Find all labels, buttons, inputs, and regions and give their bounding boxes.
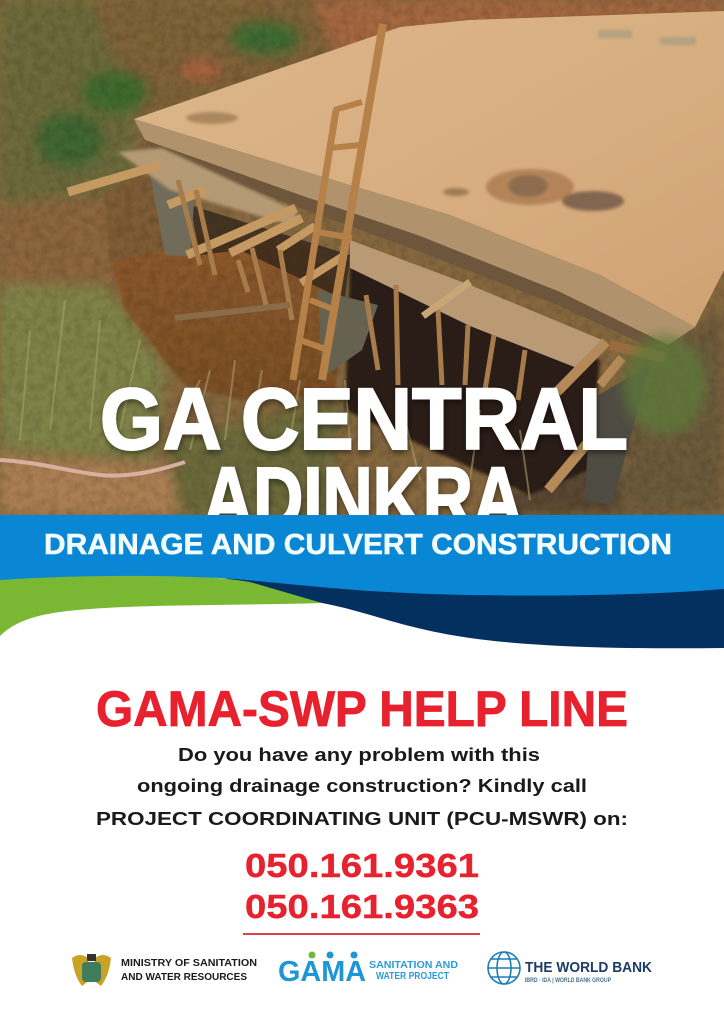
icon: globe xyxy=(488,952,520,984)
photo: foreground grass and tape xyxy=(0,460,185,476)
photo: muddy water xyxy=(110,235,345,400)
help line body text: Do you have any problem with this xyxy=(178,745,540,765)
logo: world bank xyxy=(488,952,652,984)
help line body text: ongoing drainage construction? Kindly call xyxy=(137,776,587,796)
construction site photo xyxy=(0,0,724,547)
photo: concrete slab xyxy=(134,11,724,327)
phone underline xyxy=(243,933,480,935)
logo: world bank: IBRD · IDA | WORLD BANK GROUP xyxy=(525,978,611,984)
photo: timber props xyxy=(68,165,665,490)
wave: navy xyxy=(200,572,724,648)
logo: gama: WATER PROJECT xyxy=(376,971,449,982)
phone numbers: 050.161.9363 xyxy=(245,888,479,925)
photo: earth bank and vegetation xyxy=(0,0,724,515)
help line body text: PROJECT COORDINATING UNIT (PCU-MSWR) on: xyxy=(96,808,628,829)
logo: ministry of sanitation: AND WATER RESOURCES xyxy=(121,971,247,983)
title: GA CENTRAL xyxy=(100,371,628,468)
logo: ministry of sanitation: MINISTRY OF SANITATION xyxy=(121,957,257,969)
photo: slab stains xyxy=(186,30,696,211)
photo: wooden ladder xyxy=(293,24,383,380)
phone numbers xyxy=(245,847,479,925)
header band waves xyxy=(0,515,724,648)
help line body text xyxy=(96,745,628,829)
logo: gama: SANITATION AND xyxy=(369,960,458,971)
photo: bank beside water xyxy=(105,172,165,262)
logo: gama xyxy=(278,952,458,988)
photo: grain xyxy=(0,0,724,515)
blue banner xyxy=(0,515,724,596)
title: ADINKRA xyxy=(203,450,523,547)
logo: ministry of sanitation xyxy=(72,954,257,986)
banner subtitle: DRAINAGE AND CULVERT CONSTRUCTION xyxy=(44,529,672,561)
help line heading: GAMA-SWP HELP LINE xyxy=(96,681,628,737)
logo: world bank: THE WORLD BANK xyxy=(525,959,652,976)
icon: ghana coat of arms xyxy=(72,954,111,986)
logo: gama: GAMA xyxy=(278,956,366,988)
phone numbers: 050.161.9361 xyxy=(245,847,479,884)
photo: dark void under slab xyxy=(345,262,600,495)
title xyxy=(100,387,630,515)
photo: concrete piers xyxy=(150,172,195,256)
wave: green xyxy=(0,574,322,636)
